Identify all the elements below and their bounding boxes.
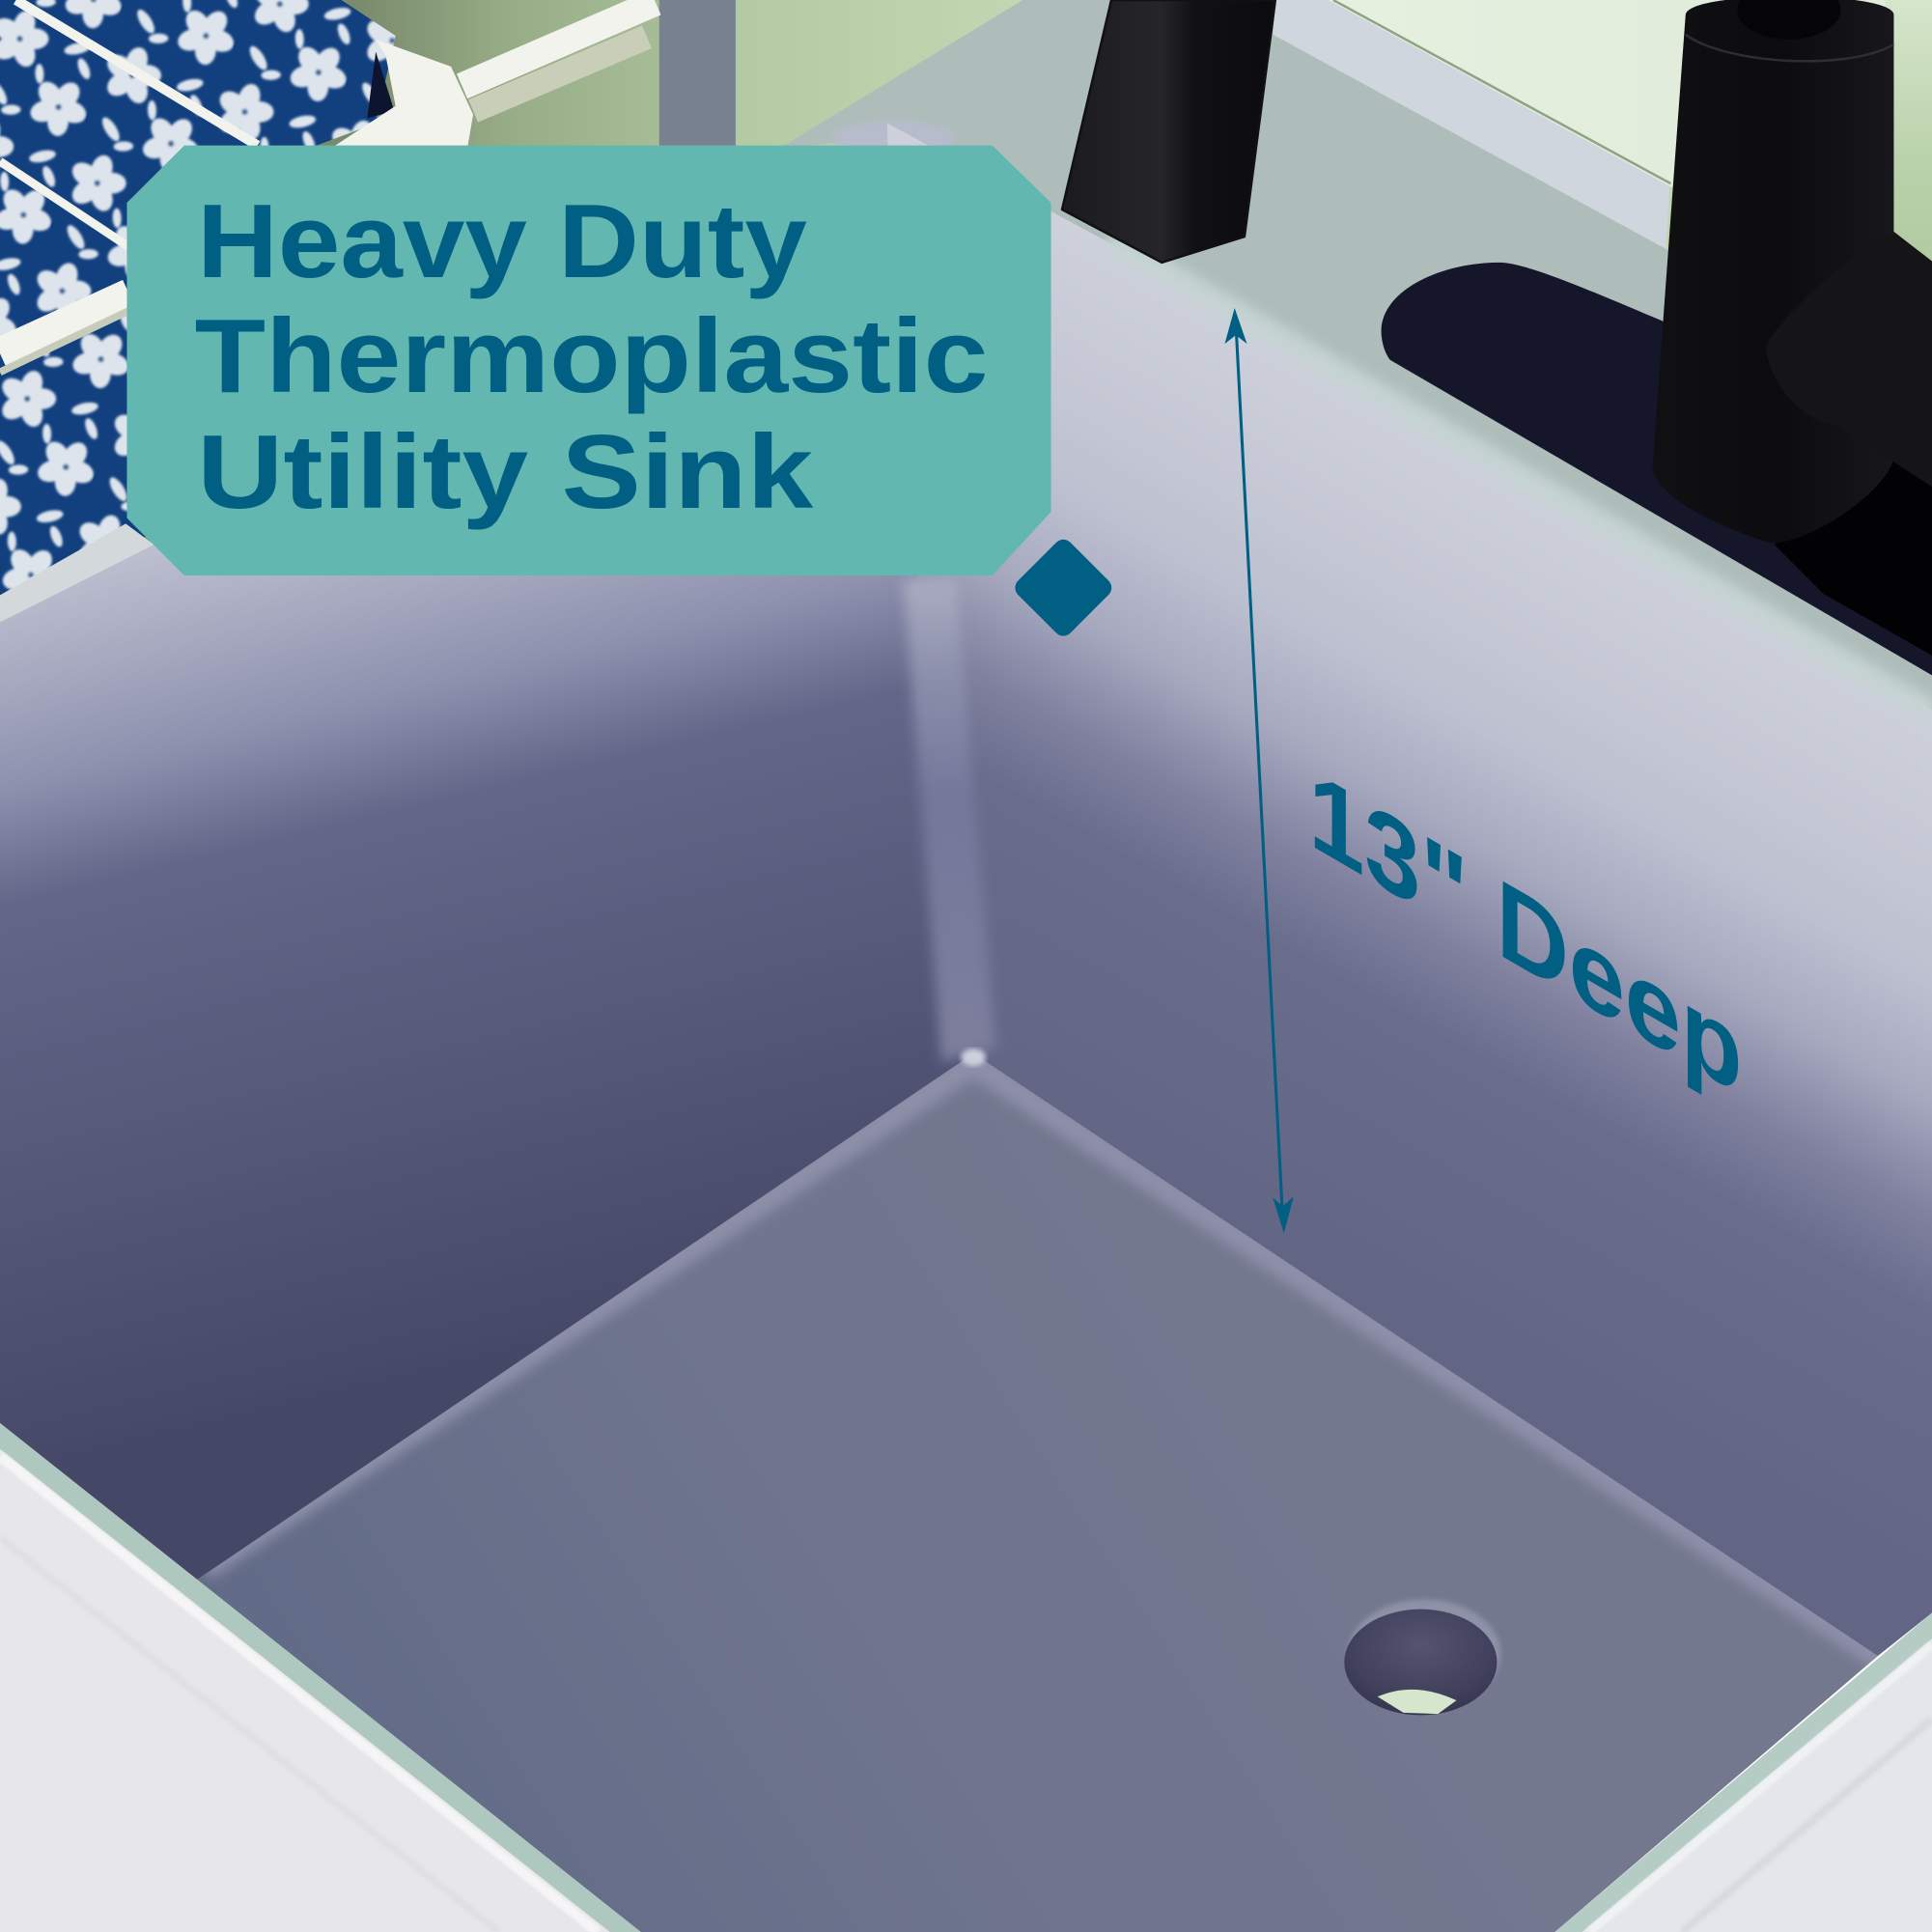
- spout of faucet: [1062, 0, 1275, 263]
- depth label: 13" Deep: [1308, 745, 1742, 1119]
- floor ridges: [204, 1062, 1886, 1660]
- corner fold between walls: [903, 579, 995, 1062]
- diamond marker: [1011, 536, 1115, 640]
- sink floor: [197, 1053, 1878, 1932]
- left rim behind the label: [0, 523, 154, 622]
- label heading: [195, 182, 988, 530]
- basin corner highlight: [831, 121, 955, 155]
- white drying rack: [0, 0, 656, 372]
- label panel: [128, 147, 1050, 574]
- pale wall edge line: [1333, 0, 1670, 183]
- left rim of sink: [0, 1423, 641, 1932]
- label heading: Thermoplastic: [195, 297, 988, 414]
- wall strip at right of faucet: [1886, 0, 1932, 277]
- rim highlight along right wall: [1109, 240, 1932, 714]
- deck back ledge: [1273, 0, 1669, 249]
- corner highlight: [961, 1049, 986, 1066]
- pale wall panel: [1329, 0, 1932, 321]
- drain: [1344, 1599, 1500, 1715]
- label heading: Heavy Duty: [197, 182, 807, 299]
- faucet body: [1652, 0, 1893, 544]
- plate shadow: [1775, 459, 1932, 656]
- faucet arm: [1766, 232, 1932, 487]
- faucet base plate: [1382, 263, 1932, 675]
- label heading: Utility Sink: [197, 413, 814, 530]
- depth arrow: [1224, 308, 1294, 1233]
- grey support pole: [659, 0, 736, 154]
- right front rim of sink: [1554, 1612, 1932, 1932]
- right inner wall of sink: [887, 124, 1932, 1656]
- green back wall: [0, 0, 1932, 740]
- left inner wall of sink: [0, 543, 980, 1580]
- sink back deck: [776, 0, 1932, 740]
- floral fabric: [0, 0, 396, 603]
